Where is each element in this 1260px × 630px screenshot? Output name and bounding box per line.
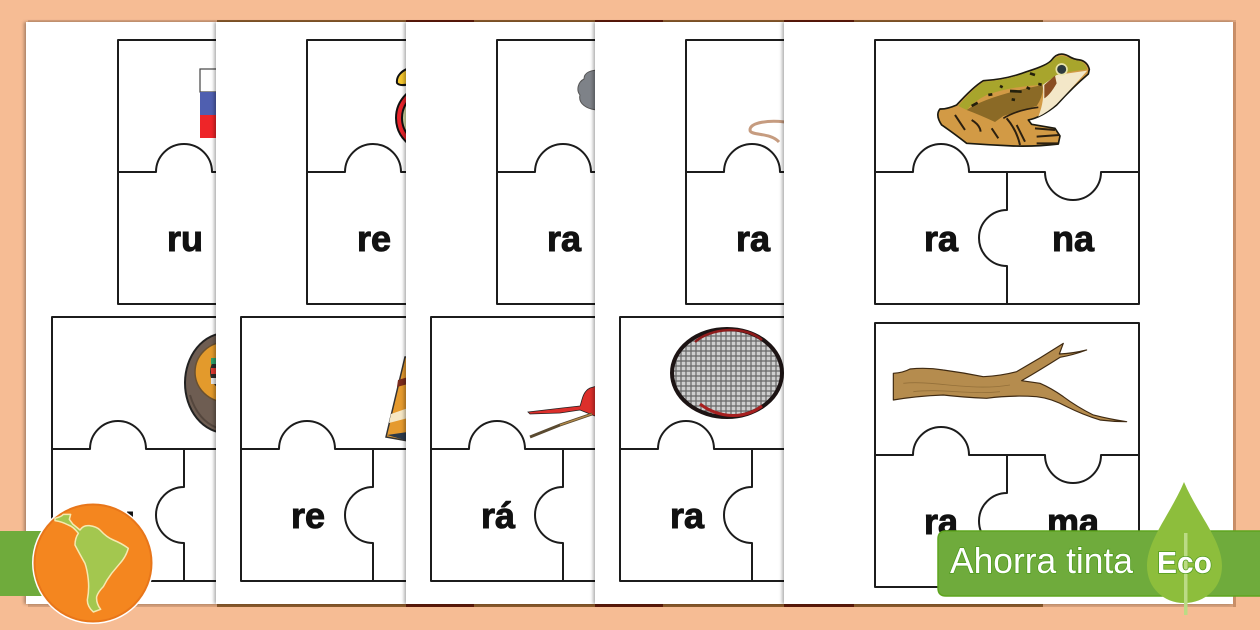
text: ahorra tinta: Ahorra tinta (950, 540, 1134, 581)
panel: puzzle sheet 2 (216, 22, 406, 604)
puzzle: ru (118, 40, 382, 304)
label: ma: ma (1047, 501, 1100, 542)
label: rá: rá (481, 495, 516, 536)
puzzle: rá lower (431, 317, 695, 581)
puzzle: ra (686, 40, 950, 304)
puzzle: ra (497, 40, 761, 304)
icon: frog (938, 54, 1089, 146)
icon: striped cone (386, 357, 408, 441)
icon: green leaf (1147, 482, 1222, 615)
label: ru: ru (167, 218, 203, 259)
icon: red insect legs (528, 385, 600, 437)
icon: grey animal (578, 70, 600, 110)
banner: ahorra tinta eco (938, 482, 1260, 615)
panel: puzzle sheet 4 (595, 22, 784, 604)
puzzle: re (307, 40, 571, 304)
label: na: na (1052, 218, 1095, 259)
icon: alarm clock (396, 68, 462, 151)
label: re lower: re (291, 495, 325, 536)
puzzle: re lower (241, 317, 505, 581)
panel: puzzle sheet 3 (406, 22, 595, 604)
puzzle: ra ma (875, 323, 1139, 587)
label: re: re (357, 218, 391, 259)
icon: south america map (55, 514, 128, 612)
puzzle: ra lower (620, 317, 884, 581)
icon: branch (893, 343, 1127, 422)
icon: russian flag (200, 69, 230, 138)
icon: rat tail (750, 121, 785, 142)
label: ra: ra (736, 218, 771, 259)
green band left (0, 531, 50, 596)
label: ra: ra (924, 218, 959, 259)
icon: roulette wheel (185, 333, 267, 433)
label: ra: ra (924, 501, 959, 542)
puzzle: ra na (875, 40, 1139, 304)
puzzle: lower (52, 317, 316, 581)
label: ra lower: ra (670, 495, 705, 536)
panel: puzzle sheet 5 (784, 22, 1233, 604)
label: ra: ra (547, 218, 582, 259)
label: ru lower: ru (99, 498, 135, 539)
icon: racket (672, 329, 782, 417)
text: eco: Eco (1157, 545, 1212, 580)
badge: south america globe (32, 502, 154, 624)
panel: puzzle sheet 1 (26, 22, 216, 604)
